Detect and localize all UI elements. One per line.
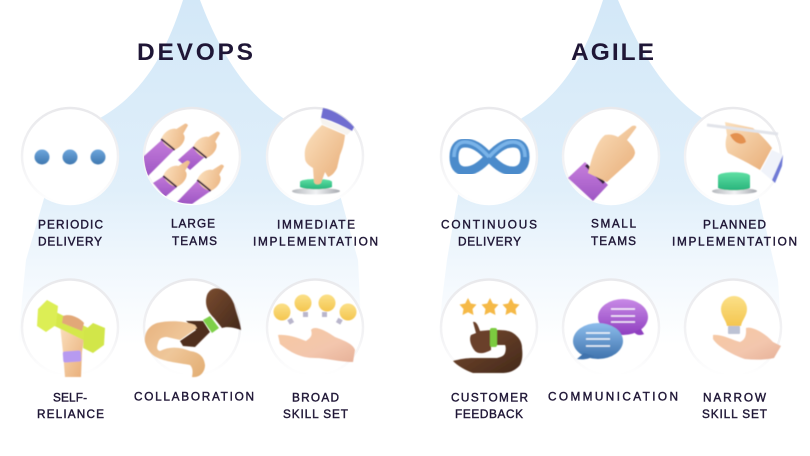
label: IMPLEMENTATION	[253, 234, 378, 248]
label: DELIVERY	[38, 234, 102, 248]
label: IMPLEMENTATION	[672, 234, 797, 248]
item: broad skill set	[267, 280, 363, 421]
circle	[441, 108, 537, 204]
label: COMMUNICATION	[548, 390, 678, 404]
label	[38, 218, 103, 248]
item: large teams	[143, 108, 240, 248]
label: COLLABORATION	[134, 390, 254, 404]
label	[441, 218, 537, 248]
icon: three dots	[34, 150, 106, 164]
heading: agile: AGILE	[571, 39, 654, 66]
label: LARGE	[171, 217, 215, 231]
icon: two speech bubbles	[573, 299, 648, 359]
icon: stars and thumbs up	[453, 298, 522, 373]
circle	[267, 280, 363, 376]
label: PLANNED	[703, 218, 766, 232]
background: devops drop shape	[18, 0, 362, 345]
circle	[267, 108, 363, 204]
label	[591, 217, 636, 248]
label: CONTINUOUS	[441, 218, 537, 232]
icon: single bulb over open hand	[713, 296, 781, 360]
item: self-reliance	[22, 280, 118, 421]
label	[253, 218, 378, 248]
label: TEAMS	[591, 234, 636, 248]
icon: four pointing arms	[144, 123, 224, 204]
background: agile drop shape	[438, 0, 782, 345]
label: BROAD	[292, 390, 339, 404]
icon: finger pressing button	[292, 108, 354, 194]
item: narrow skill set	[685, 280, 781, 421]
label: FEEDBACK	[455, 407, 523, 421]
circle	[144, 108, 240, 204]
icon: infinity loop	[454, 142, 525, 171]
icon: four bulbs over open hand	[274, 294, 356, 362]
panel: agile	[441, 39, 797, 421]
item: customer feedback	[441, 280, 537, 421]
label: CUSTOMER	[451, 390, 528, 404]
heading: devops: DEVOPS	[137, 39, 253, 66]
circle	[685, 280, 781, 376]
item: collaboration	[134, 280, 254, 404]
label: IMMEDIATE	[277, 218, 355, 232]
circle	[563, 108, 659, 204]
circle	[441, 280, 537, 376]
circle	[563, 280, 659, 376]
label	[171, 217, 217, 248]
label: SKILL SET	[702, 407, 767, 421]
circle	[22, 108, 118, 204]
label	[702, 390, 767, 421]
label	[672, 218, 797, 248]
icon: single pointing arm	[568, 126, 636, 201]
item: periodic delivery	[22, 108, 118, 248]
item: communication	[548, 280, 678, 404]
label: SMALL	[591, 217, 636, 231]
icon: hand with dumbbell	[37, 300, 105, 377]
label: NARROW	[703, 390, 767, 404]
label: RELIANCE	[37, 407, 104, 421]
label: DELIVERY	[458, 234, 521, 248]
circle	[144, 280, 240, 376]
circle	[22, 280, 118, 376]
item: small teams	[563, 108, 659, 248]
item: planned implementation	[672, 108, 797, 248]
label	[283, 390, 348, 421]
label: SELF-	[53, 391, 87, 405]
label	[37, 391, 104, 421]
item: continuous delivery	[441, 108, 537, 248]
label: SKILL SET	[283, 407, 348, 421]
label: PERIODIC	[38, 218, 103, 232]
circle	[685, 108, 781, 204]
icon: hand holding pen above button	[707, 122, 783, 194]
panel: devops	[22, 39, 378, 421]
item: immediate implementation	[253, 108, 378, 248]
icon: handshake of two arms	[145, 288, 241, 377]
label: TEAMS	[172, 234, 217, 248]
label	[451, 390, 528, 421]
